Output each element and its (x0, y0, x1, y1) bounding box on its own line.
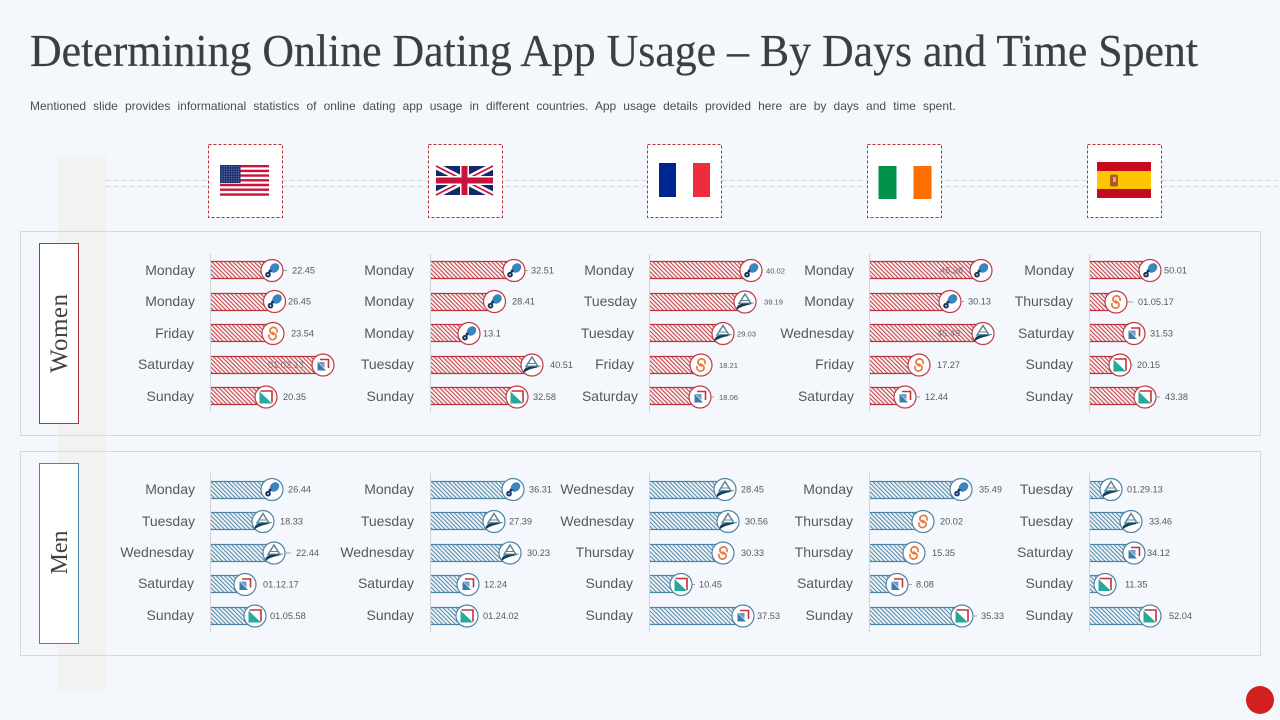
row: France Tuesday 39.19: Tuesday (584, 293, 637, 309)
row: Spain Thursday 01.05.17: 01.05.17 (1138, 297, 1174, 307)
row: UK Monday 32.51: Monday (364, 262, 414, 278)
row: France Sunday 10.45: 10.45 (699, 580, 722, 590)
row: Spain Saturday 34.12: 34.12 (1147, 548, 1170, 558)
row: Ireland Wednesday 45.49 (780, 322, 994, 344)
row: France Saturday 18.06: 18.06 (719, 393, 738, 402)
row: UK Saturday 12.24: Saturday (358, 575, 414, 591)
row: US Monday 22.45: Monday (145, 262, 195, 278)
title: Determining Online Dating App Usage – By Days and Time Spent (30, 26, 1198, 76)
row: Ireland Saturday 12.44: Saturday (798, 388, 854, 404)
row: France Wednesday 30.56 (560, 510, 768, 532)
row: France Saturday 18.06 (582, 386, 738, 408)
row: UK Monday 13.1 (364, 322, 501, 344)
row: Ireland Thursday 20.02 (795, 510, 963, 532)
row: Ireland Monday 45.38: Monday (804, 262, 854, 278)
subtitle: Mentioned slide provides informational statistics of online dating app usage in different countries. App usage details provided here are by days and time spent. (30, 99, 956, 113)
flag card: France (648, 144, 722, 218)
row: UK Saturday 12.24 (358, 574, 507, 596)
row: US Friday 23.54: 23.54 (291, 328, 314, 338)
row: UK Monday 28.41: 28.41 (512, 296, 535, 306)
row: France Tuesday 29.03: 29.03 (737, 330, 756, 338)
row: US Saturday 01.12.17: Saturday (138, 575, 194, 591)
row: US Monday 26.44: Monday (145, 481, 195, 497)
row: Ireland Friday 17.27: Friday (815, 356, 854, 372)
row: UK Monday 36.31 (364, 478, 552, 500)
row: US Wednesday 22.44: 22.44 (296, 548, 319, 558)
row: Spain Tuesday 01.29.13: 01.29.13 (1127, 484, 1163, 494)
row: France Thursday 30.33: Thursday (576, 544, 634, 560)
row: UK Monday 28.41 (364, 290, 535, 312)
row: France Saturday 18.06: Saturday (582, 388, 638, 404)
row: UK Wednesday 30.23 (340, 542, 550, 564)
row: US Sunday 01.05.58 (147, 605, 306, 627)
row: Spain Saturday 34.12 (1017, 542, 1170, 564)
row: US Monday 26.44: 26.44 (288, 484, 311, 494)
label: Men (40, 464, 78, 644)
row: Spain Sunday 52.04: 52.04 (1169, 611, 1192, 621)
row: US Saturday 01.02.13: Saturday (138, 356, 194, 372)
row: Ireland Thursday 15.35: Thursday (795, 544, 853, 560)
row: Ireland Monday 45.38 (804, 260, 992, 282)
row: France Friday 18.21: 18.21 (719, 361, 738, 370)
row: France Sunday 10.45 (586, 574, 722, 596)
row: France Sunday 37.53: Sunday (586, 607, 633, 623)
row: Ireland Sunday 35.33: 35.33 (981, 611, 1004, 621)
row: US Tuesday 18.33: 18.33 (280, 516, 303, 526)
row: Ireland Monday 30.13: 30.13 (968, 296, 991, 306)
row: France Wednesday 28.45: 28.45 (741, 484, 764, 494)
row: Spain Monday 50.01 (1024, 260, 1187, 282)
row: US Monday 22.45: 22.45 (292, 266, 315, 276)
row: Spain Monday 50.01: Monday (1024, 262, 1074, 278)
row: US Saturday 01.12.17: 01.12.17 (263, 580, 299, 590)
row: US Tuesday 18.33: Tuesday (142, 513, 195, 529)
row: France Friday 18.21 (595, 354, 738, 376)
row: US Sunday 20.35: 20.35 (283, 392, 306, 402)
row: UK Monday 36.31: Monday (364, 481, 414, 497)
row: UK Monday 32.51: 32.51 (531, 266, 554, 276)
row: UK Sunday 32.58: Sunday (367, 388, 414, 404)
row: Spain Sunday 43.38: 43.38 (1165, 392, 1188, 402)
row: Ireland Friday 17.27: 17.27 (937, 360, 960, 370)
row: Spain Saturday 31.53: Saturday (1018, 325, 1074, 341)
row: Ireland Thursday 20.02: Thursday (795, 513, 853, 529)
row: Spain Tuesday 33.46: 33.46 (1149, 516, 1172, 526)
row: US Monday 26.44 (145, 478, 311, 500)
row: Spain Saturday 31.53 (1018, 322, 1173, 344)
label: Men: Men (47, 530, 73, 574)
row: Ireland Thursday 15.35 (795, 542, 955, 564)
row: Spain Tuesday 33.46: Tuesday (1020, 513, 1073, 529)
row: Ireland Monday 45.38: 45.38 (940, 266, 963, 276)
row: Ireland Friday 17.27 (815, 354, 960, 376)
row: US Saturday 01.12.17 (138, 574, 299, 596)
grey vertical band (57, 156, 106, 691)
row: UK Sunday 01.24.02: Sunday (367, 607, 414, 623)
flag card: United States (208, 144, 282, 218)
row: France Wednesday 28.45: Wednesday (560, 481, 634, 497)
row: Ireland Sunday 35.33: Sunday (806, 607, 853, 623)
label: Women (40, 244, 78, 424)
row: UK Tuesday 27.39: Tuesday (361, 513, 414, 529)
row: US Tuesday 18.33 (142, 510, 303, 532)
row: Spain Sunday 52.04 (1026, 605, 1192, 627)
row: US Friday 23.54 (155, 322, 314, 344)
row: UK Wednesday 30.23: Wednesday (340, 544, 414, 560)
row: Ireland Saturday 8.08: Saturday (797, 575, 853, 591)
row: US Saturday 01.02.13: 01.02.13 (268, 360, 304, 370)
row: France Monday 40.02: Monday (584, 262, 634, 278)
row: UK Monday 36.31: 36.31 (529, 484, 552, 494)
row: US Monday 22.45 (145, 260, 315, 282)
row: Spain Monday 50.01: 50.01 (1164, 266, 1187, 276)
red page marker dot (1246, 686, 1274, 714)
row: Ireland Sunday 35.33 (806, 605, 1004, 627)
row: France Tuesday 39.19: 39.19 (764, 298, 783, 306)
row: Spain Sunday 20.15: Sunday (1026, 356, 1073, 372)
row: Ireland Monday 35.49: 35.49 (979, 484, 1002, 494)
row: UK Tuesday 40.51: 40.51 (550, 360, 573, 370)
row: Spain Sunday 43.38: Sunday (1026, 388, 1073, 404)
row: France Thursday 30.33 (576, 542, 764, 564)
row: UK Saturday 12.24: 12.24 (484, 580, 507, 590)
row: Spain Sunday 11.35: Sunday (1026, 575, 1073, 591)
row: UK Monday 13.1: 13.1 (483, 328, 501, 338)
panel: men (20, 452, 1260, 656)
flag card: Spain (1088, 144, 1162, 218)
panel: women (20, 232, 1260, 436)
row: US Wednesday 22.44 (120, 542, 319, 564)
row: US Monday 26.45: Monday (145, 293, 195, 309)
label: Women: Women (46, 294, 73, 373)
row: Spain Saturday 34.12: Saturday (1017, 544, 1073, 560)
row: US Sunday 01.05.58: 01.05.58 (270, 611, 306, 621)
flag card: Ireland (868, 144, 942, 218)
row: France Sunday 37.53: 37.53 (757, 611, 780, 621)
row: France Monday 40.02: 40.02 (766, 266, 785, 276)
row: France Wednesday 30.56: 30.56 (745, 516, 768, 526)
flag card: United Kingdom (428, 144, 502, 218)
row: Spain Sunday 11.35 (1026, 574, 1147, 596)
row: US Sunday 20.35 (147, 386, 306, 408)
row: UK Monday 28.41: Monday (364, 293, 414, 309)
row: UK Tuesday 40.51 (361, 354, 573, 376)
row: UK Monday 32.51 (364, 260, 554, 282)
row: Ireland Monday 35.49 (803, 478, 1002, 500)
row: Ireland Saturday 12.44: 12.44 (925, 392, 948, 402)
row: US Friday 23.54: Friday (155, 325, 194, 341)
row: UK Tuesday 27.39 (361, 510, 532, 532)
row: France Thursday 30.33: 30.33 (741, 548, 764, 558)
row: Spain Thursday 01.05.17: Thursday (1015, 293, 1073, 309)
row: UK Monday 13.1: Monday (364, 325, 414, 341)
row: Ireland Saturday 12.44 (798, 386, 948, 408)
row: Spain Sunday 52.04: Sunday (1026, 607, 1073, 623)
row: UK Tuesday 27.39: 27.39 (509, 516, 532, 526)
row: France Wednesday 30.56: Wednesday (560, 513, 634, 529)
row: France Wednesday 28.45 (560, 478, 764, 500)
row: France Sunday 10.45: Sunday (586, 575, 633, 591)
row: US Monday 26.45: 26.45 (288, 296, 311, 306)
row: Spain Tuesday 33.46 (1020, 510, 1172, 532)
row: France Monday 40.02 (584, 260, 785, 282)
row: Spain Saturday 31.53: 31.53 (1150, 328, 1173, 338)
row: France Tuesday 29.03 (581, 322, 756, 344)
row: UK Tuesday 40.51: Tuesday (361, 356, 414, 372)
row: France Friday 18.21: Friday (595, 356, 634, 372)
row: US Sunday 20.35: Sunday (147, 388, 194, 404)
row: Ireland Monday 30.13: Monday (804, 293, 854, 309)
row: Ireland Wednesday 45.49: 45.49 (937, 328, 960, 338)
row: Ireland Wednesday 45.49: Wednesday (780, 325, 854, 341)
row: Spain Sunday 11.35: 11.35 (1125, 580, 1147, 590)
row: Spain Sunday 43.38 (1026, 386, 1188, 408)
row: France Tuesday 39.19 (584, 291, 783, 313)
row: US Wednesday 22.44: Wednesday (120, 544, 194, 560)
row: UK Sunday 01.24.02: 01.24.02 (483, 611, 519, 621)
row: UK Wednesday 30.23: 30.23 (527, 548, 550, 558)
row: Ireland Monday 35.49: Monday (803, 481, 853, 497)
row: US Saturday 01.02.13 (138, 354, 334, 376)
row: Spain Thursday 01.05.17 (1015, 291, 1174, 313)
row: Ireland Thursday 20.02: 20.02 (940, 516, 963, 526)
row: Ireland Monday 30.13 (804, 290, 991, 312)
row: Spain Tuesday 01.29.13 (1020, 478, 1163, 500)
row: UK Sunday 01.24.02 (367, 605, 519, 627)
row: Spain Sunday 20.15: 20.15 (1137, 360, 1160, 370)
row: Ireland Saturday 8.08: 8.08 (916, 580, 934, 590)
row: UK Sunday 32.58 (367, 386, 556, 408)
row: UK Sunday 32.58: 32.58 (533, 392, 556, 402)
row: US Sunday 01.05.58: Sunday (147, 607, 194, 623)
row: France Sunday 37.53 (586, 605, 780, 627)
row: Spain Tuesday 01.29.13: Tuesday (1020, 481, 1073, 497)
row: Spain Sunday 20.15 (1026, 354, 1160, 376)
row: France Tuesday 29.03: Tuesday (581, 325, 634, 341)
row: Ireland Saturday 8.08 (797, 574, 934, 596)
row: US Monday 26.45 (145, 290, 311, 312)
row: Ireland Thursday 15.35: 15.35 (932, 548, 955, 558)
